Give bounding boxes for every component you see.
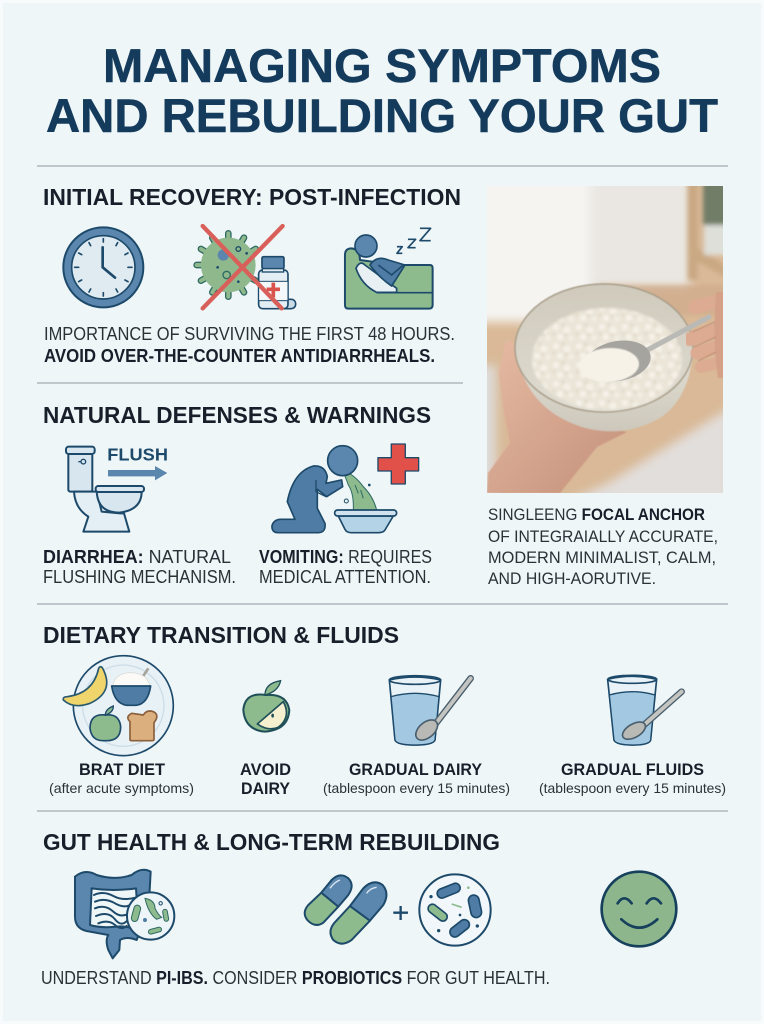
caption: photo text	[488, 506, 718, 588]
label: BRAT diet	[49, 760, 194, 796]
icon: probiotic capsules	[305, 875, 408, 944]
icon: apple	[243, 681, 289, 732]
text block: medical attention: MEDICAL ATTENTION.	[259, 567, 431, 587]
label: BRAT diet: (after acute symptoms)	[49, 780, 194, 796]
icon: toilet with flush arrow: FLUSH	[107, 445, 168, 465]
panel: dietary transition and fluids	[43, 622, 726, 798]
spoon	[640, 317, 709, 354]
text block: flushing mechanism: FLUSHING MECHANISM.	[43, 567, 236, 587]
title: AND REBUILDING YOUR GUT	[46, 89, 718, 142]
panel: initial recovery	[43, 184, 461, 366]
label: gradual fluids: GRADUAL FLUIDS	[561, 760, 704, 779]
icon: person vomiting into basin	[272, 444, 419, 533]
bowl	[522, 358, 692, 432]
text block: first 48 hours: IMPORTANCE OF SURVIVING THE FIRST 48 HOURS.	[44, 324, 455, 344]
left hand	[487, 340, 627, 493]
panel: gut health	[41, 829, 676, 988]
label: avoid dairy: AVOID	[240, 760, 291, 779]
label: gradual dairy	[323, 760, 510, 796]
right hand	[690, 292, 730, 378]
label: gradual dairy: (tablespoon every 15 minutes)	[323, 780, 510, 796]
label: avoid dairy	[240, 760, 291, 798]
caption: photo text: MODERN MINIMALIST, CALM,	[488, 549, 716, 567]
caption: photo text: AND HIGH-AORUTIVE.	[488, 570, 656, 588]
text block: vomiting: VOMITING: REQUIRES	[259, 547, 432, 567]
icon: BRAT diet plate	[63, 656, 173, 756]
text block: diarrhea: DIARRHEA: NATURAL	[43, 547, 231, 567]
icon: intestines with bacteria lens	[75, 870, 174, 958]
label: gradual fluids	[539, 760, 726, 796]
text block: first 48 hours	[44, 324, 455, 366]
label: avoid dairy: DAIRY	[241, 779, 291, 798]
label: gradual dairy: GRADUAL DAIRY	[349, 760, 483, 779]
panel: natural defenses and warnings	[43, 402, 432, 587]
icon: clock	[63, 227, 143, 307]
icon: crossed virus and medicine	[197, 226, 296, 309]
heading: natural defenses: NATURAL DEFENSES & WARNINGS	[43, 402, 431, 428]
caption: photo text: OF INTEGRAIALLY ACCURATE,	[488, 528, 718, 546]
icon: glass with spoon (fluids)	[608, 675, 682, 745]
icon: glass with spoon (dairy)	[389, 676, 471, 745]
caption: photo text: SINGLEENG FOCAL ANCHOR	[488, 506, 705, 524]
icon: smiling face	[602, 872, 676, 946]
heading: gut health: GUT HEALTH & LONG-TERM REBUILDING	[43, 829, 500, 855]
icon: toilet with flush arrow	[66, 445, 168, 532]
icon: bacteria circle	[419, 874, 491, 946]
photo: bowl of rice congee held in hands	[487, 186, 723, 493]
heading: initial recovery: INITIAL RECOVERY: POST-INFECTION	[43, 184, 461, 210]
title	[46, 39, 718, 142]
text block: first 48 hours: AVOID OVER-THE-COUNTER ANTIDIARRHEALS.	[44, 346, 435, 366]
label: BRAT diet: BRAT DIET	[79, 760, 166, 779]
label: gradual fluids: (tablespoon every 15 minutes)	[539, 780, 726, 796]
title: MANAGING SYMPTOMS	[103, 39, 661, 92]
icon: person resting in bed	[345, 228, 433, 309]
heading: dietary transition: DIETARY TRANSITION & FLUIDS	[43, 622, 399, 648]
text block: PI-IBS and probiotics: UNDERSTAND PI-IBS. CONSIDER PROBIOTICS FOR GUT HEALTH.	[41, 968, 550, 988]
